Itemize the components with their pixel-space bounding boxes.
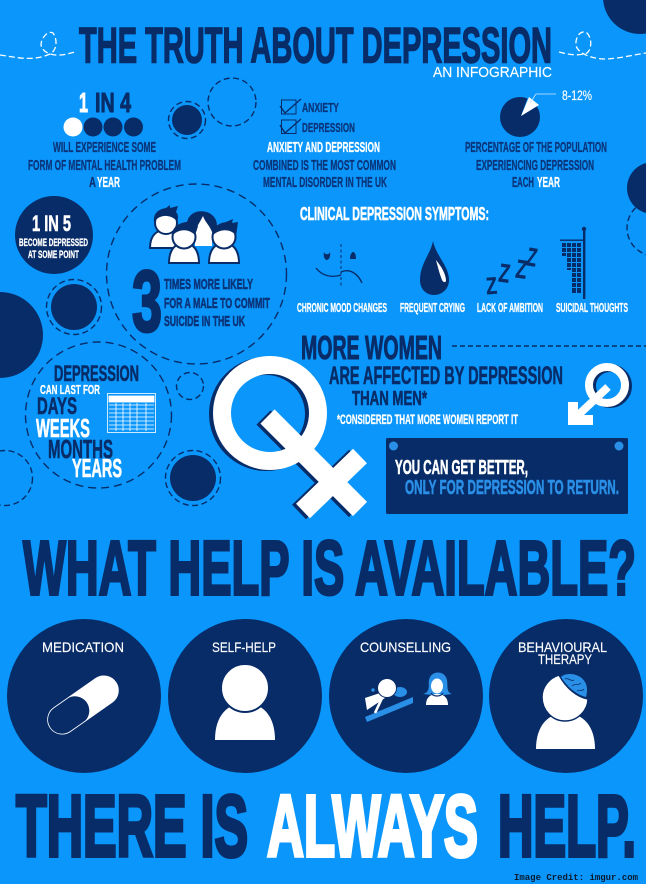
panel: depression duration: CAN LAST FOR [40, 382, 100, 397]
panel: self-help [168, 619, 322, 773]
closing statement: THERE IS [16, 778, 248, 875]
stat: anxiety and depression: COMBINED IS THE MOST COMMON [253, 157, 396, 174]
stat: 8-12 percent pie [465, 87, 607, 191]
stat: 1 in 4: YEAR [97, 174, 120, 191]
dashed swirl left [0, 32, 75, 58]
stat: anxiety and depression [253, 99, 396, 191]
panel: counselling: COUNSELLING [360, 639, 451, 655]
stat: anxiety and depression: ANXIETY [302, 101, 339, 115]
icon: patient on couch [365, 678, 413, 722]
dashed swirl right [559, 32, 646, 59]
text: more women: THAN MEN* [352, 388, 427, 410]
icon: sleeping Z letters: Z [485, 273, 498, 300]
panel: clinical depression symptoms [297, 204, 628, 315]
icon: person [215, 664, 275, 740]
stat: 1 in 5 circle: BECOME DEPRESSED [19, 237, 88, 249]
text: more women [301, 329, 646, 427]
panel: depression duration: DAYS [37, 393, 77, 420]
panel: depression duration: DEPRESSION [54, 361, 139, 386]
icon: sleeping Z letters [485, 241, 540, 300]
stat: anxiety and depression: DEPRESSION [302, 121, 355, 135]
icon: sleeping Z letters: Z [497, 257, 512, 289]
stat: anxiety and depression: MENTAL DISORDER IN THE UK [263, 174, 387, 191]
panel: 3 times more likely: SUICIDE IN THE UK [164, 313, 245, 330]
icon: sleeping Z letters: Z [524, 241, 540, 273]
icon: tear drop [420, 241, 449, 295]
stat: 8-12 percent pie: 8-12% [562, 87, 592, 103]
image credit: Image Credit: imgur.com [514, 873, 639, 883]
stat: anxiety and depression: ANXIETY AND DEPRESSION [267, 139, 380, 156]
panel: medication [7, 619, 161, 773]
stat: 1 in 4: FORM OF MENTAL HEALTH PROBLEM [28, 157, 181, 174]
panel: 3 times more likely: 3 [132, 254, 162, 350]
panel: medication: MEDICATION [42, 639, 124, 655]
icon: sleeping Z letters: Z [514, 253, 529, 285]
stat: 8-12 percent pie: EACH [512, 174, 534, 191]
text: more women: MORE WOMEN [301, 329, 442, 366]
panel: depression duration: YEARS [72, 453, 122, 483]
icon: group of people [150, 205, 239, 263]
panel: behavioural therapy [489, 619, 643, 773]
panel: counselling [329, 619, 483, 773]
stat: 1 in 4: IN 4 [95, 87, 131, 118]
subtitle: AN INFOGRAPHIC [433, 64, 552, 81]
closing statement: ALWAYS [267, 778, 478, 875]
stat: 1 in 4: A [89, 174, 96, 191]
stat: 1 in 4: WILL EXPERIENCE SOME [53, 139, 156, 156]
icon: mood face [316, 244, 362, 287]
icon: tall building [560, 227, 586, 299]
panel: 3 times more likely: TIMES MORE LIKELY [164, 276, 253, 293]
panel: clinical depression symptoms: LACK OF AMBITION [477, 301, 543, 315]
panel: clinical depression symptoms: CLINICAL DEPRESSION SYMPTOMS: [300, 204, 489, 224]
text: more women: *CONSIDERED THAT MORE WOMEN REPORT IT [337, 412, 518, 427]
icon: pill [42, 670, 124, 740]
stat: 1 in 5 circle: 1 IN 5 [32, 211, 71, 236]
panel: clinical depression symptoms: FREQUENT CRYING [400, 301, 465, 315]
icon: calendar [108, 394, 156, 432]
panel: behavioural therapy: THERAPY [538, 651, 593, 667]
decorative circles [0, 0, 646, 506]
stat: 1 in 5 circle: AT SOME POINT [28, 249, 79, 261]
panel: self-help: SELF-HELP [212, 639, 276, 655]
icon: female symbol [218, 365, 360, 512]
panel: depression duration: MONTHS [48, 434, 113, 464]
stat: 1 in 5 circle [15, 196, 93, 274]
icon: therapist [423, 672, 452, 705]
panel: depression duration: WEEKS [36, 413, 90, 443]
callout: you can get better [386, 438, 628, 514]
panel: 3 times more likely: FOR A MALE TO COMMIT [164, 295, 270, 312]
closing statement [16, 778, 636, 875]
panel: behavioural therapy: BEHAVIOURAL [518, 639, 607, 655]
panel: depression duration [26, 342, 172, 488]
panel: 3 times more likely [106, 184, 286, 364]
icon: male symbol [568, 367, 628, 425]
panel: clinical depression symptoms: CHRONIC MOOD CHANGES [297, 301, 387, 315]
stat: 8-12 percent pie: YEAR [537, 174, 560, 191]
stat: 1 in 4 [28, 87, 181, 191]
icon: head with brain [536, 674, 595, 749]
stat: 1 in 4: 1 [79, 87, 88, 118]
callout: you can get better: YOU CAN GET BETTER, [395, 457, 528, 479]
